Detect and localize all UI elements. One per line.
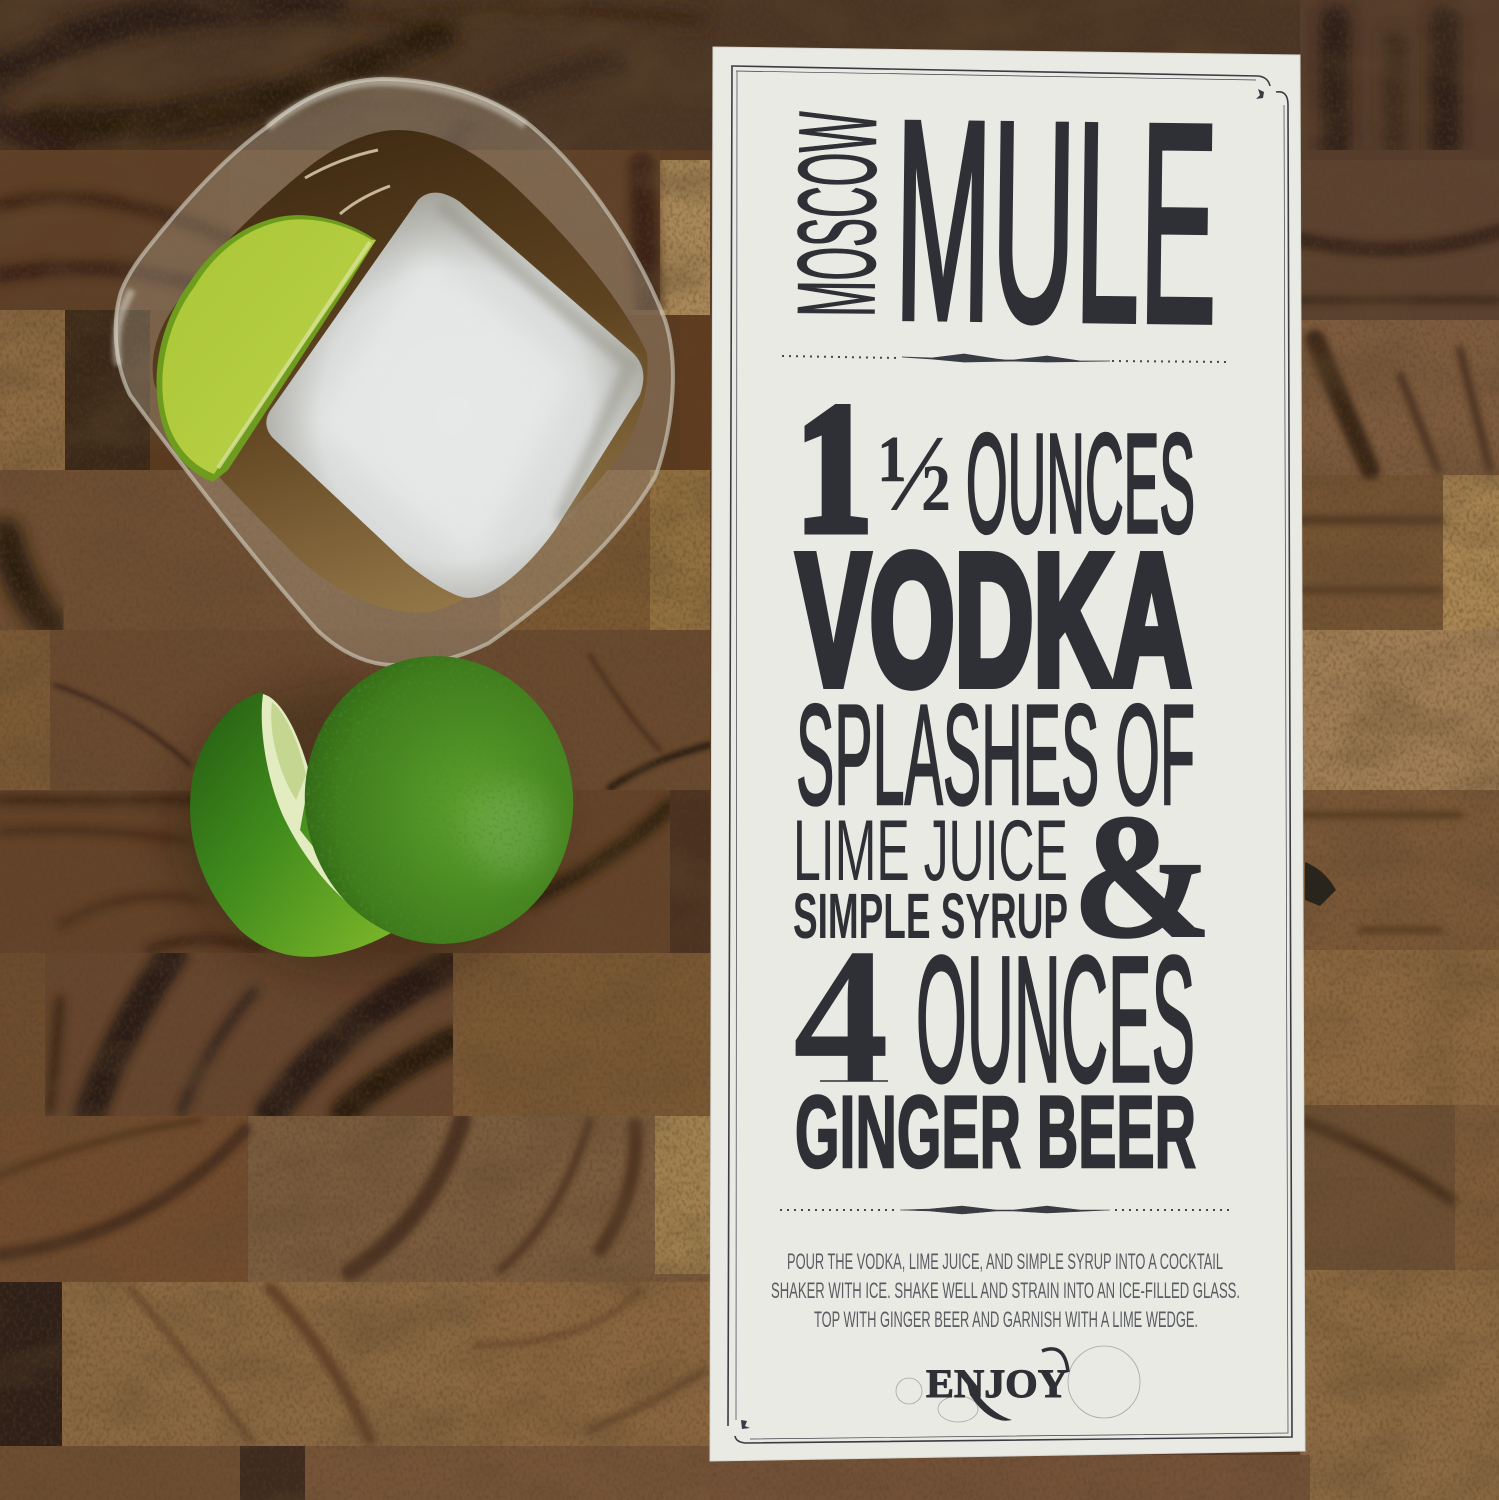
enjoy flourish: ENJOY — [926, 1361, 1068, 1406]
instructions: TOP WITH GINGER BEER AND GARNISH WITH A LIME WEDGE. — [814, 1307, 1198, 1332]
amount: 4 ounces — [793, 908, 1195, 1123]
ampersand: & — [1072, 777, 1212, 975]
bottom divider — [780, 1206, 1232, 1214]
lime and glass cast shadows — [170, 680, 550, 980]
amount: 1 1/2 ounces: ½ — [878, 412, 952, 534]
ingredient: simple syrup: SIMPLE SYRUP — [793, 880, 1068, 952]
ingredient: ginger beer: GINGER BEER — [795, 1075, 1196, 1189]
ingredient: lime juice: LIME JUICE — [793, 803, 1068, 899]
glass tumbler with ice and lime — [116, 79, 673, 665]
card paper — [710, 47, 1305, 1461]
amount: 4 ounces: 4 — [793, 908, 889, 1123]
decorative frame — [728, 66, 1292, 1443]
ice cube — [266, 193, 643, 598]
amount: 1 1/2 ounces — [796, 366, 1195, 570]
glass body — [116, 79, 673, 665]
lime wedge — [157, 215, 376, 482]
instructions — [771, 1249, 1240, 1332]
amount: 1 1/2 ounces: 1 — [796, 366, 872, 570]
top divider — [782, 354, 1228, 362]
enjoy flourish — [896, 1346, 1140, 1422]
recipe card — [710, 47, 1305, 1461]
liquid highlights — [305, 150, 390, 214]
ingredient: vodka: VODKA — [797, 517, 1191, 724]
whole lime — [304, 656, 574, 944]
knot in the wood — [1305, 862, 1336, 906]
cut lime half — [190, 692, 393, 957]
liquid — [153, 130, 648, 612]
whole and cut limes — [190, 656, 574, 957]
glass rim highlight — [117, 82, 525, 365]
